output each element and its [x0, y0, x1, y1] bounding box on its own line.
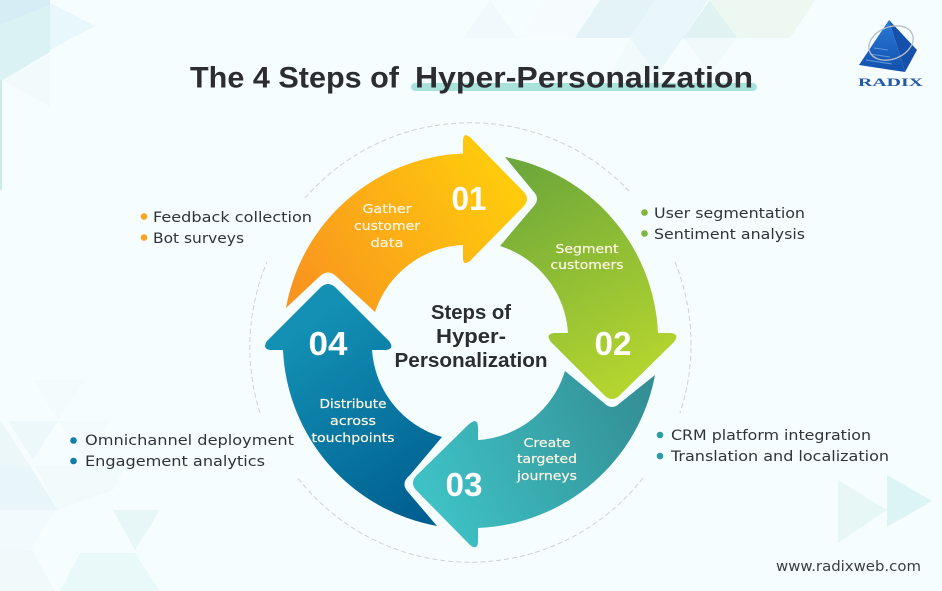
website url: www.radixweb.com [776, 559, 921, 575]
list: step 3 [657, 428, 889, 465]
list: step 4: Engagement analytics [85, 454, 265, 470]
list: step 1: Bot surveys [153, 231, 244, 247]
center label: Personalization [394, 350, 548, 372]
arrow 02: segment customers: 02 [594, 325, 632, 362]
arrow 01: gather customer data: Gather [362, 201, 412, 216]
arrow 04: distribute across touchpoints: 04 [308, 325, 348, 362]
arrow 03: create targeted journeys: journeys [516, 468, 577, 483]
list: step 3: Translation and localization [670, 449, 889, 465]
list: step 1 [141, 210, 312, 247]
title: The 4 Steps of [190, 62, 400, 94]
arrow 04: distribute across touchpoints: across [330, 413, 376, 428]
list: step 4: Omnichannel deployment [85, 433, 294, 449]
dashed ring [250, 123, 691, 562]
arrow 03: create targeted journeys: Create [524, 435, 571, 450]
arrow 04: distribute across touchpoints [265, 284, 442, 526]
arrow 04: distribute across touchpoints: Distribute [320, 396, 387, 411]
title: Hyper-Personalization [415, 62, 753, 94]
center label [394, 302, 548, 372]
list: step 2: User segmentation [654, 206, 805, 222]
arrow 01: gather customer data [286, 135, 527, 312]
title [190, 62, 757, 94]
center label: Hyper- [436, 326, 506, 348]
logo: Radix [858, 20, 924, 89]
arrow 01: gather customer data: customer [354, 218, 421, 233]
arrow 01: gather customer data: 01 [452, 180, 486, 217]
logo: Radix: RADIX [858, 75, 924, 89]
arrow 02: segment customers: customers [550, 257, 624, 272]
list: step 1: Feedback collection [153, 210, 312, 226]
decorative double arrow [838, 475, 932, 543]
arrow 03: create targeted journeys [413, 371, 655, 547]
arrow 02: segment customers [500, 157, 676, 399]
list: step 4 [70, 433, 294, 470]
arrow 01: gather customer data: data [370, 235, 404, 250]
arrow 04: distribute across touchpoints: touchpoints [312, 430, 394, 445]
list: step 2: Sentiment analysis [654, 227, 805, 243]
arrow 03: create targeted journeys: 03 [446, 466, 482, 503]
list: step 2 [641, 206, 805, 243]
arrow 03: create targeted journeys: targeted [517, 451, 577, 466]
arrow 02: segment customers: Segment [556, 241, 619, 256]
list: step 3: CRM platform integration [671, 428, 871, 444]
center label: Steps of [431, 302, 511, 324]
